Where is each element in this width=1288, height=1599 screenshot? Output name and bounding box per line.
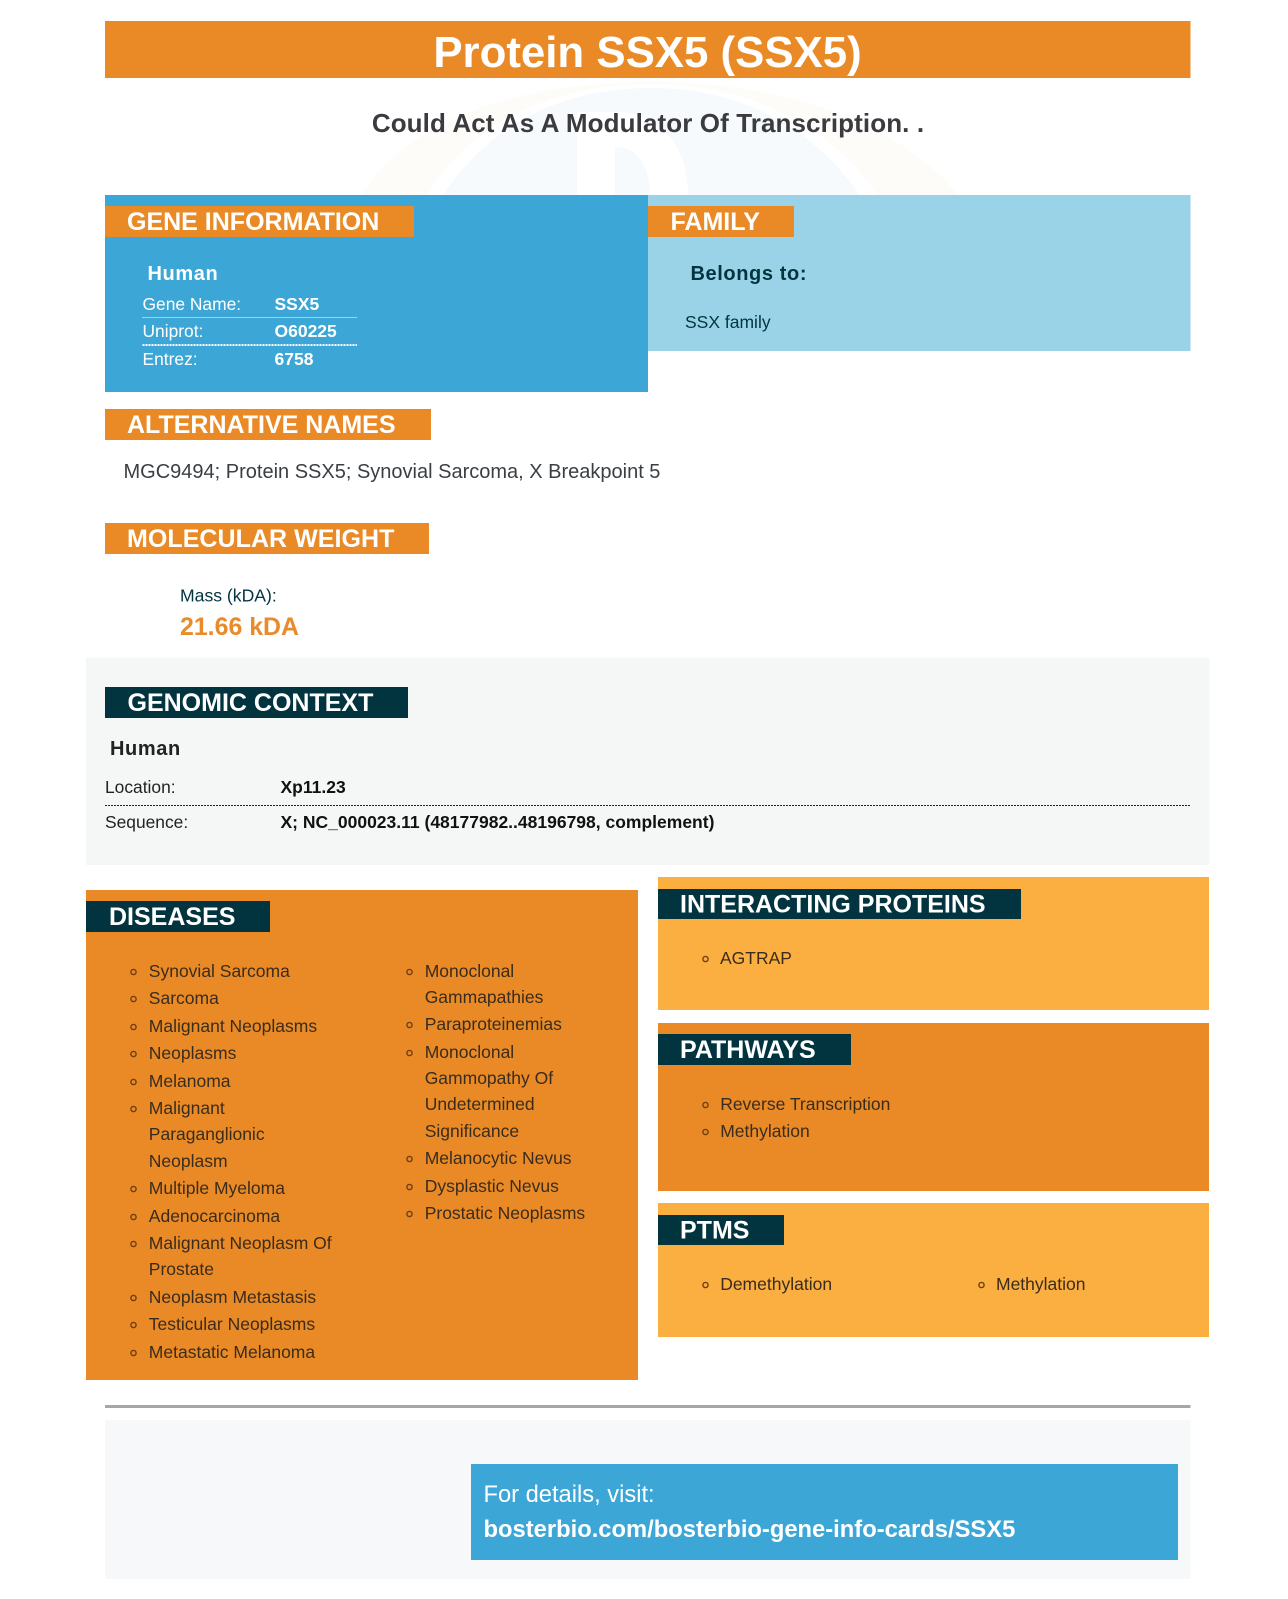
ptms list: Methylation — [996, 1274, 1086, 1294]
species label: Human — [110, 738, 181, 760]
disease list column 1: Melanoma — [149, 1071, 231, 1091]
disease list column 1: Prostate — [149, 1259, 214, 1279]
gene identifiers table: Uniprot: — [142, 321, 203, 341]
gene identifiers table: SSX5 — [274, 294, 320, 314]
panel: ptms — [658, 1203, 1209, 1337]
gene identifiers table — [142, 294, 357, 369]
gene identifiers table: Gene Name: — [142, 294, 241, 314]
disease list column 1: Malignant Neoplasm Of — [149, 1233, 332, 1253]
disease list column 2: Monoclonal — [425, 1042, 514, 1062]
ptms list: Demethylation — [720, 1274, 832, 1294]
heading: family — [648, 206, 794, 237]
callout: details link — [471, 1464, 1178, 1560]
title banner: Protein SSX5 (SSX5) — [433, 28, 862, 77]
disease list column 1: Malignant — [149, 1098, 225, 1118]
ptms list — [703, 1274, 1086, 1294]
interacting proteins list: AGTRAP — [720, 948, 792, 968]
belongs to label: Belongs to: — [690, 263, 807, 285]
family value: SSX family — [685, 312, 771, 332]
disease list column 1: Neoplasm — [149, 1151, 228, 1171]
gene identifiers table: Entrez: — [142, 349, 198, 369]
section: molecular weight — [105, 523, 429, 641]
background watermark logo — [362, 82, 958, 195]
heading: diseases — [86, 901, 270, 932]
pathways list — [703, 1094, 890, 1141]
panel: diseases — [86, 890, 638, 1380]
disease list column 2: Prostatic Neoplasms — [425, 1203, 585, 1223]
gene identifiers table: O60225 — [274, 321, 337, 341]
alternative names text: MGC9494; Protein SSX5; Synovial Sarcoma, X Breakpoint 5 — [124, 461, 660, 483]
section: alternative names — [105, 409, 660, 483]
disease list column 1 — [131, 961, 332, 1362]
disease list column 1: Testicular Neoplasms — [149, 1314, 315, 1334]
sequence row: Sequence: — [105, 812, 188, 832]
title banner — [105, 21, 1190, 78]
disease list column 1: Neoplasm Metastasis — [149, 1287, 316, 1307]
disease list column 2: Dysplastic Nevus — [425, 1176, 559, 1196]
panel: pathways — [658, 1023, 1209, 1191]
disease list column 2: Gammopathy Of — [425, 1068, 553, 1088]
pathways list: Methylation — [720, 1121, 810, 1141]
panel: interacting proteins — [658, 877, 1209, 1010]
heading: alternative names: ALTERNATIVE NAMES — [127, 411, 396, 439]
heading: interacting proteins: INTERACTING PROTEINS — [680, 890, 986, 918]
disease list column 2: Gammapathies — [425, 987, 544, 1007]
heading: diseases: DISEASES — [109, 903, 235, 931]
mass value: 21.66 kDA — [180, 613, 299, 641]
disease list column 2 — [407, 961, 585, 1223]
disease list column 2: Monoclonal — [425, 961, 514, 981]
panel: footer — [105, 1420, 1190, 1579]
heading: gene information: GENE INFORMATION — [127, 208, 379, 236]
location row — [105, 777, 346, 797]
heading: ptms: PTMS — [680, 1216, 749, 1244]
disease list column 2: Undetermined — [425, 1094, 535, 1114]
disease list column 1: Metastatic Melanoma — [149, 1342, 315, 1362]
species label: Human — [148, 263, 218, 285]
heading: genomic context: GENOMIC CONTEXT — [128, 689, 373, 717]
heading: family: FAMILY — [670, 208, 760, 236]
location row: Xp11.23 — [280, 777, 346, 797]
disease list column 2: Melanocytic Nevus — [425, 1148, 572, 1168]
disease list column 1: Paraganglionic — [149, 1124, 265, 1144]
subtitle: Could Act As A Modulator Of Transcription. . — [372, 108, 924, 138]
callout: details link: For details, visit: — [484, 1482, 655, 1508]
disease list column 2: Paraproteinemias — [425, 1014, 562, 1034]
disease list column 1: Sarcoma — [149, 988, 219, 1008]
disease list column 1: Neoplasms — [149, 1043, 237, 1063]
location row: Location: — [105, 777, 176, 797]
pathways list: Reverse Transcription — [720, 1094, 890, 1114]
panel: gene information — [105, 195, 648, 392]
disease list column 1: Adenocarcinoma — [149, 1206, 280, 1226]
heading: pathways: PATHWAYS — [680, 1036, 816, 1064]
sequence row: X; NC_000023.11 (48177982..48196798, complement) — [280, 812, 714, 832]
disease list column 2: Significance — [425, 1121, 519, 1141]
mass label: Mass (kDA): — [180, 586, 277, 606]
panel: family — [648, 195, 1190, 351]
callout: details link: bosterbio.com/bosterbio-gene-info-cards/SSX5 — [484, 1516, 1015, 1543]
gene identifiers table: 6758 — [274, 349, 314, 369]
disease list column 1: Malignant Neoplasms — [149, 1016, 317, 1036]
heading: pathways — [658, 1034, 851, 1065]
panel: genomic context — [86, 658, 1210, 865]
disease list column 1: Multiple Myeloma — [149, 1178, 285, 1198]
heading: ptms — [658, 1215, 784, 1245]
disease list column 1: Synovial Sarcoma — [149, 961, 290, 981]
heading: molecular weight: MOLECULAR WEIGHT — [127, 525, 394, 553]
